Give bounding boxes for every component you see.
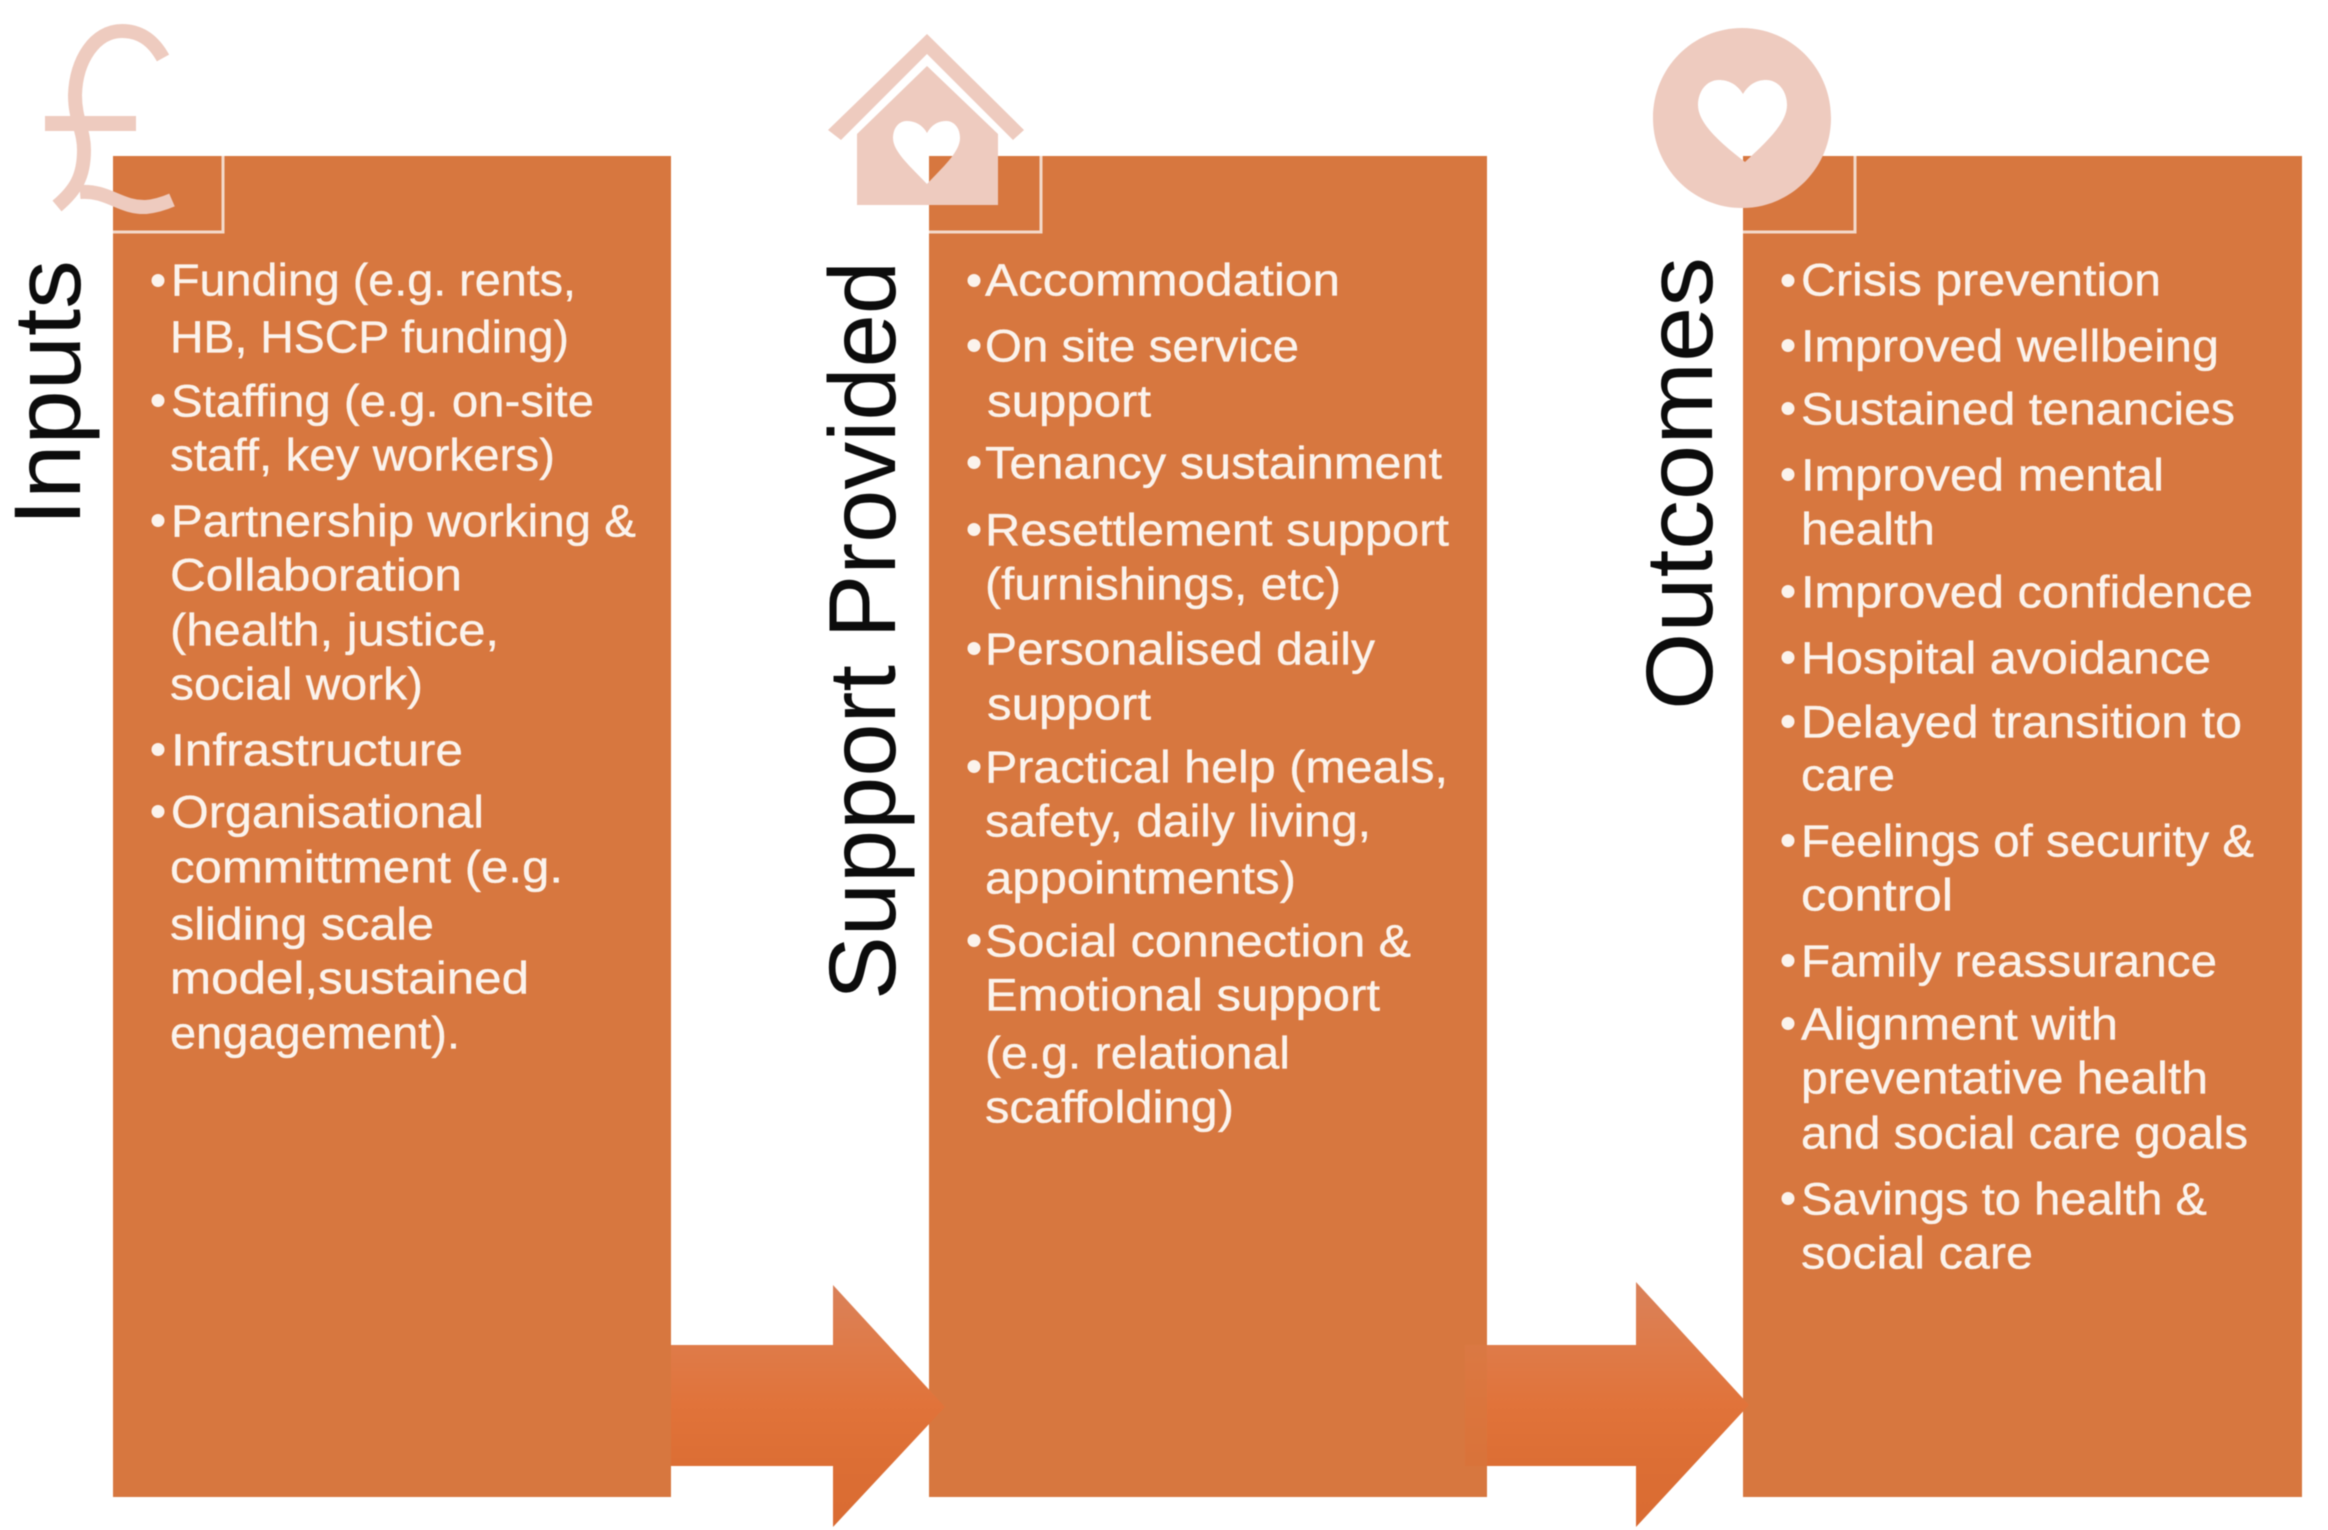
item: improved mental health — [1782, 450, 2164, 554]
item: crisis prevention: Crisis prevention — [1801, 254, 2161, 306]
item: savings: social care — [1801, 1228, 2033, 1278]
item: personalised daily support — [968, 624, 1376, 730]
item: feelings of security and control — [1782, 816, 2254, 920]
item: personalised daily support: support — [987, 678, 1152, 730]
heading: Support Provided: Support Provided — [810, 261, 916, 1000]
icon: pound sign — [45, 31, 172, 207]
item: delayed transition to care: Delayed transition to — [1801, 696, 2242, 748]
item: organisational commitment: sliding scale — [170, 898, 434, 950]
item: staffing: Staffing (e.g. on-site — [171, 376, 594, 426]
item: alignment with goals: and social care goals — [1801, 1108, 2248, 1158]
text block: support provided list — [968, 254, 1450, 1132]
item: infrastructure: Infrastructure — [171, 724, 463, 776]
text block: inputs list — [152, 254, 636, 1058]
item: personalised daily support: Personalised daily — [985, 624, 1376, 674]
item: alignment with goals: Alignment with — [1801, 998, 2118, 1050]
item: family reassurance: Family reassurance — [1801, 936, 2217, 986]
item: alignment with goals: preventative health — [1801, 1052, 2208, 1104]
item: improved wellbeing: Improved wellbeing — [1801, 320, 2219, 372]
item: feelings of security and control: control — [1801, 870, 1953, 920]
icon: circle with heart — [1653, 28, 1831, 208]
arrow: inputs to support — [671, 1285, 945, 1527]
heading: Outcomes: Outcomes — [1627, 257, 1733, 710]
item: social connection: Social connection & — [985, 916, 1411, 966]
item: organisational commitment: Organisational — [171, 786, 484, 838]
item: organisational commitment: model,sustained — [170, 952, 529, 1004]
item: sustained tenancies: Sustained tenancies — [1801, 384, 2235, 434]
item: resettlement support: Resettlement support — [985, 504, 1450, 556]
item: partnership working: Collaboration — [170, 550, 462, 600]
panel: support provided — [929, 156, 1487, 1497]
arrow: support to outcomes — [1465, 1282, 1749, 1527]
item: organisational commitment: committment (e.g. — [170, 842, 563, 892]
item: partnership working: Partnership working & — [171, 496, 636, 546]
panel: outcomes — [1743, 156, 2302, 1497]
item: hospital avoidance: Hospital avoidance — [1801, 632, 2211, 684]
item: partnership working: (health, justice, — [170, 604, 499, 656]
item: delayed transition to care — [1782, 696, 2242, 800]
item: savings: Savings to health & — [1801, 1174, 2207, 1224]
item: improved mental health: health — [1801, 504, 1935, 554]
item: funding — [152, 254, 576, 362]
item: delayed transition to care: care — [1801, 750, 1895, 800]
item: improved confidence: Improved confidence — [1801, 566, 2253, 618]
item: social connection: scaffolding) — [985, 1082, 1234, 1132]
item: practical help: appointments) — [985, 852, 1296, 904]
item: resettlement support: (furnishings, etc) — [985, 558, 1341, 610]
item: funding: HB, HSCP funding) — [170, 312, 569, 362]
item: organisational commitment — [152, 786, 563, 1058]
text block: outcomes list — [1782, 254, 2254, 1278]
item: on site service support: support — [987, 376, 1152, 426]
item: staffing: staff, key workers) — [170, 430, 555, 480]
item: practical help: Practical help (meals, — [985, 742, 1448, 792]
item: social connection — [968, 916, 1411, 1132]
panel: inputs — [113, 156, 671, 1497]
icon: house with heart — [828, 34, 1024, 205]
item: alignment with goals — [1782, 998, 2248, 1158]
item: social connection: (e.g. relational — [985, 1028, 1290, 1078]
item: feelings of security and control: Feelings of security & — [1801, 816, 2254, 866]
item: staffing — [152, 376, 594, 480]
item: organisational commitment: engagement). — [170, 1008, 460, 1058]
item: practical help: safety, daily living, — [985, 796, 1371, 846]
item: partnership working — [152, 496, 636, 710]
item: accommodation: Accommodation — [985, 254, 1340, 306]
item: savings — [1782, 1174, 2207, 1278]
item: partnership working: social work) — [170, 658, 423, 710]
item: on site service support — [968, 320, 1299, 426]
item: improved mental health: Improved mental — [1801, 450, 2164, 500]
item: tenancy sustainment: Tenancy sustainment — [985, 438, 1443, 488]
item: resettlement support — [968, 504, 1450, 610]
item: practical help — [968, 742, 1448, 904]
item: social connection: Emotional support — [985, 970, 1381, 1020]
item: on site service support: On site service — [985, 320, 1299, 372]
item: funding: Funding (e.g. rents, — [171, 254, 576, 306]
